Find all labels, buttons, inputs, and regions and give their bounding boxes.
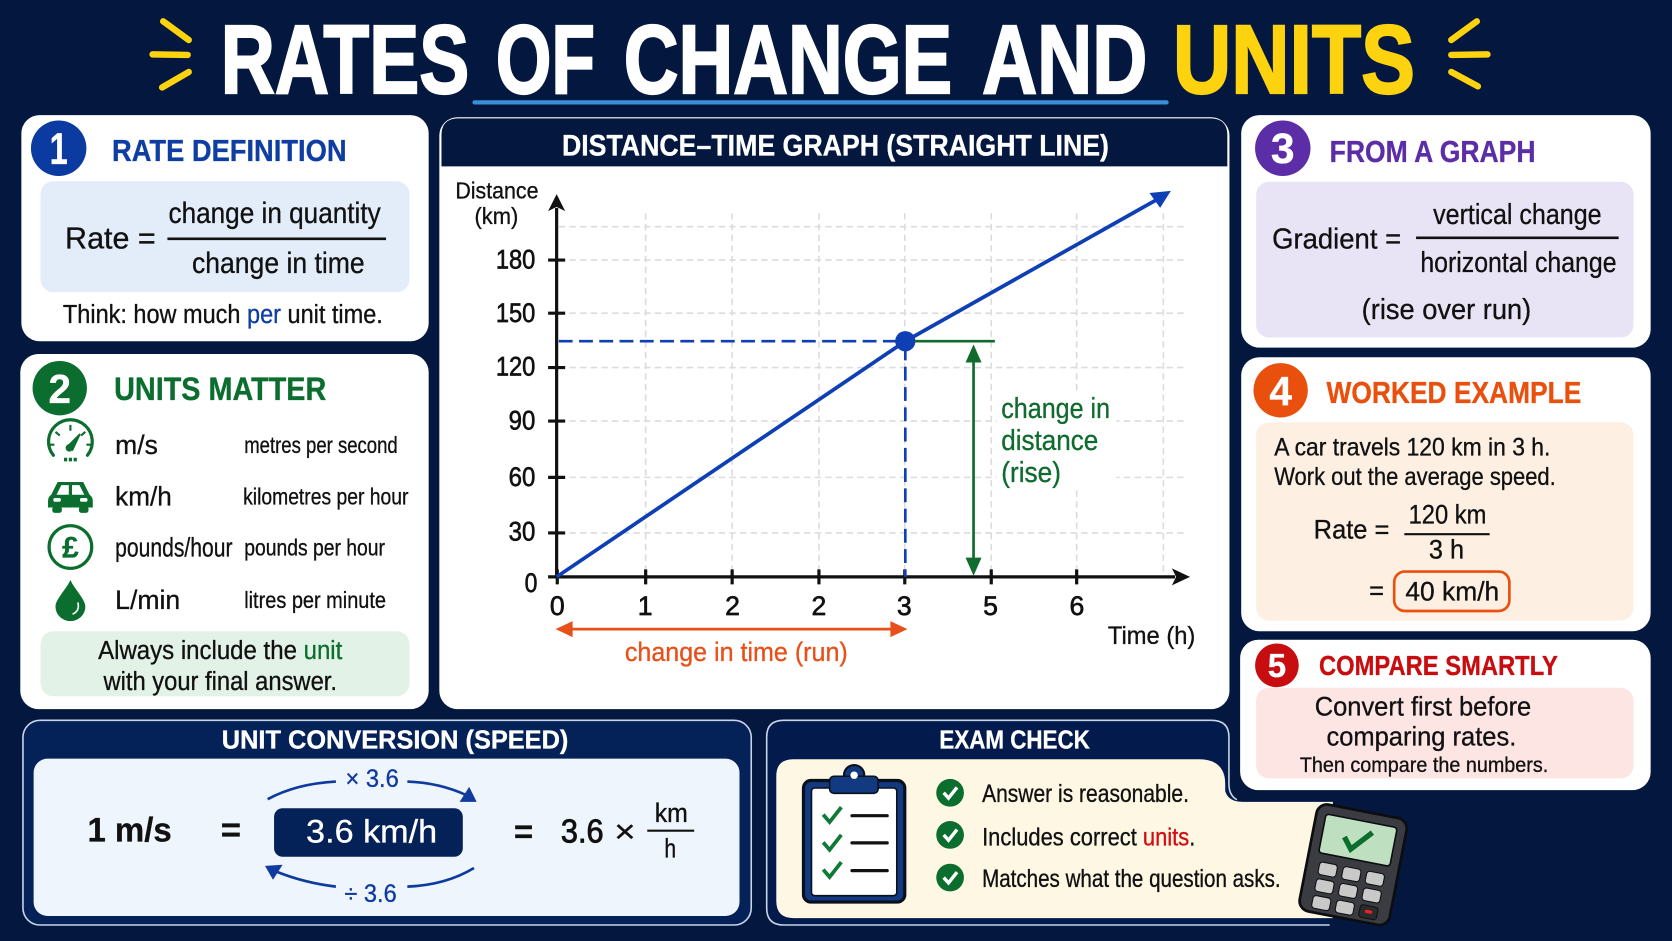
formula box: Gradient =	[1272, 223, 1401, 255]
badge 2	[33, 361, 87, 415]
units list: pounds per hour	[244, 535, 385, 561]
x axis labels: 6	[1070, 591, 1084, 621]
heading: WORKED EXAMPLE	[1326, 375, 1581, 410]
conversion box: 3.6	[561, 813, 604, 850]
formula box: (rise over run)	[1362, 294, 1531, 326]
result pill	[274, 808, 463, 857]
heading: EXAM CHECK	[939, 727, 1090, 755]
rise label: change in	[1001, 393, 1110, 425]
note box: with your final answer.	[103, 668, 337, 696]
panel: 1 rate definition	[21, 115, 429, 341]
panel: 5 compare smartly	[1240, 640, 1651, 790]
y axis labels: 180	[496, 245, 535, 275]
heading: FROM A GRAPH	[1330, 134, 1535, 169]
badge 4: 4	[1269, 368, 1292, 414]
heading: RATE DEFINITION	[112, 133, 347, 168]
badge 5: 5	[1268, 648, 1286, 685]
panel: exam check	[767, 720, 1333, 925]
badge 1	[31, 120, 86, 176]
x axis labels: 2	[725, 591, 740, 621]
formula box	[1256, 182, 1634, 337]
heading: UNIT CONVERSION (SPEED)	[222, 727, 568, 755]
example box	[1256, 422, 1634, 621]
rise arrow	[915, 341, 995, 576]
formula box	[41, 181, 409, 292]
cream checklist area	[776, 759, 1333, 918]
x axis labels: 1	[638, 591, 653, 621]
note: Think: how much per unit time.	[63, 301, 383, 329]
result pill: 3.6 km/h	[306, 813, 437, 849]
x axis labels: 0	[550, 591, 565, 621]
dashed guides	[559, 341, 905, 577]
icon: right burst	[1451, 21, 1488, 86]
title: AND	[982, 5, 1147, 114]
formula box: change in quantity	[169, 197, 381, 230]
graph header	[441, 118, 1227, 166]
badge 3: 3	[1271, 125, 1295, 173]
icon: water drop	[55, 580, 85, 621]
example box: 40 km/h	[1405, 576, 1499, 606]
formula box: Rate =	[65, 220, 156, 255]
badge 1: 1	[50, 124, 68, 174]
run arrow	[556, 621, 907, 637]
panel: 2 units matter	[20, 354, 429, 709]
units list: m/s	[115, 430, 158, 460]
formula box: change in time	[192, 247, 365, 280]
rise label: (rise)	[1001, 457, 1061, 489]
message box: Then compare the numbers.	[1300, 753, 1548, 777]
y axis labels: 60	[509, 462, 535, 492]
title: CHANGE	[624, 5, 952, 114]
title: OF	[496, 5, 595, 114]
y axis title	[455, 177, 539, 229]
units list: litres per minute	[244, 587, 386, 613]
icon: calculator	[1298, 803, 1409, 927]
conversion box: km	[655, 798, 688, 828]
y axis labels: 0	[525, 568, 537, 598]
y axis title: Distance	[455, 177, 539, 203]
checklist: Answer is reasonable.	[982, 781, 1189, 808]
heading: UNITS MATTER	[114, 371, 326, 407]
y axis labels: 150	[496, 298, 535, 328]
icon: left burst	[153, 21, 189, 87]
title: RATES	[221, 5, 469, 114]
y axis labels: 90	[509, 406, 535, 436]
panel: distance-time graph	[439, 117, 1229, 709]
example box: 3 h	[1429, 535, 1464, 565]
rise label background	[997, 392, 1116, 490]
rise label: distance	[1001, 425, 1098, 457]
x axis labels: 3	[897, 591, 912, 621]
units list: metres per second	[244, 432, 398, 458]
axes	[548, 194, 1190, 585]
multiply arrow	[268, 766, 477, 802]
y axis labels	[496, 245, 537, 598]
units list: km/h	[115, 481, 172, 511]
message box: Convert first before	[1315, 691, 1531, 721]
icon: pound coin: £	[62, 532, 79, 565]
conversion box: =	[514, 813, 533, 849]
y axis labels: 30	[509, 517, 535, 547]
example box: A car travels 120 km in 3 h.	[1274, 434, 1550, 461]
formula box: vertical change	[1433, 199, 1602, 231]
checklist: Includes correct units.	[982, 825, 1195, 852]
conversion box: ×	[614, 813, 636, 849]
multiply arrow: × 3.6	[346, 766, 399, 793]
data line	[557, 191, 1171, 577]
example box: Rate =	[1314, 514, 1389, 544]
icon: speedometer	[49, 420, 92, 460]
units list: L/min	[115, 585, 180, 615]
x axis title: Time (h)	[1108, 623, 1195, 650]
icon: clipboard	[803, 765, 905, 902]
badge 3	[1255, 120, 1310, 176]
conversion box: =	[221, 811, 241, 849]
badge 2: 2	[48, 366, 71, 412]
message box: comparing rates.	[1326, 721, 1516, 751]
message box	[1256, 688, 1634, 778]
example box: =	[1369, 575, 1384, 605]
title: UNITS	[1173, 5, 1415, 114]
heading: COMPARE SMARTLY	[1319, 650, 1558, 681]
units list	[115, 430, 409, 615]
example box: 120 km	[1409, 500, 1486, 530]
checklist: Matches what the question asks.	[982, 866, 1281, 893]
units list: kilometres per hour	[243, 483, 409, 509]
conversion box: 1 m/s	[87, 811, 172, 849]
conversion box: h	[664, 833, 676, 863]
chart	[455, 177, 1195, 667]
units list: pounds/hour	[115, 533, 233, 563]
x axis labels	[550, 591, 1084, 621]
point marker	[895, 331, 915, 351]
graph header: DISTANCE–TIME GRAPH (STRAIGHT LINE)	[562, 130, 1109, 163]
title	[221, 5, 1415, 114]
example box: Work out the average speed.	[1274, 464, 1556, 491]
x axis labels: 2	[812, 591, 826, 621]
note box	[41, 631, 409, 696]
conversion box	[34, 759, 740, 916]
panel: unit conversion	[23, 720, 751, 925]
rise label	[1001, 393, 1110, 489]
note box: Always include the unit	[98, 637, 342, 665]
y axis labels: 120	[496, 351, 535, 381]
formula box: horizontal change	[1420, 247, 1617, 279]
divide arrow	[265, 865, 474, 908]
x axis labels: 5	[983, 591, 998, 621]
icon: pound coin	[49, 526, 92, 568]
y axis title: (km)	[475, 203, 518, 229]
panel: 3 from a graph	[1241, 115, 1651, 348]
checklist	[936, 779, 1281, 893]
badge 4	[1253, 363, 1308, 417]
panel: 4 worked example	[1241, 357, 1651, 631]
badge 5	[1255, 644, 1299, 687]
run label: change in time (run)	[625, 637, 848, 667]
icon: car	[48, 482, 93, 513]
divide arrow: ÷ 3.6	[344, 881, 397, 908]
